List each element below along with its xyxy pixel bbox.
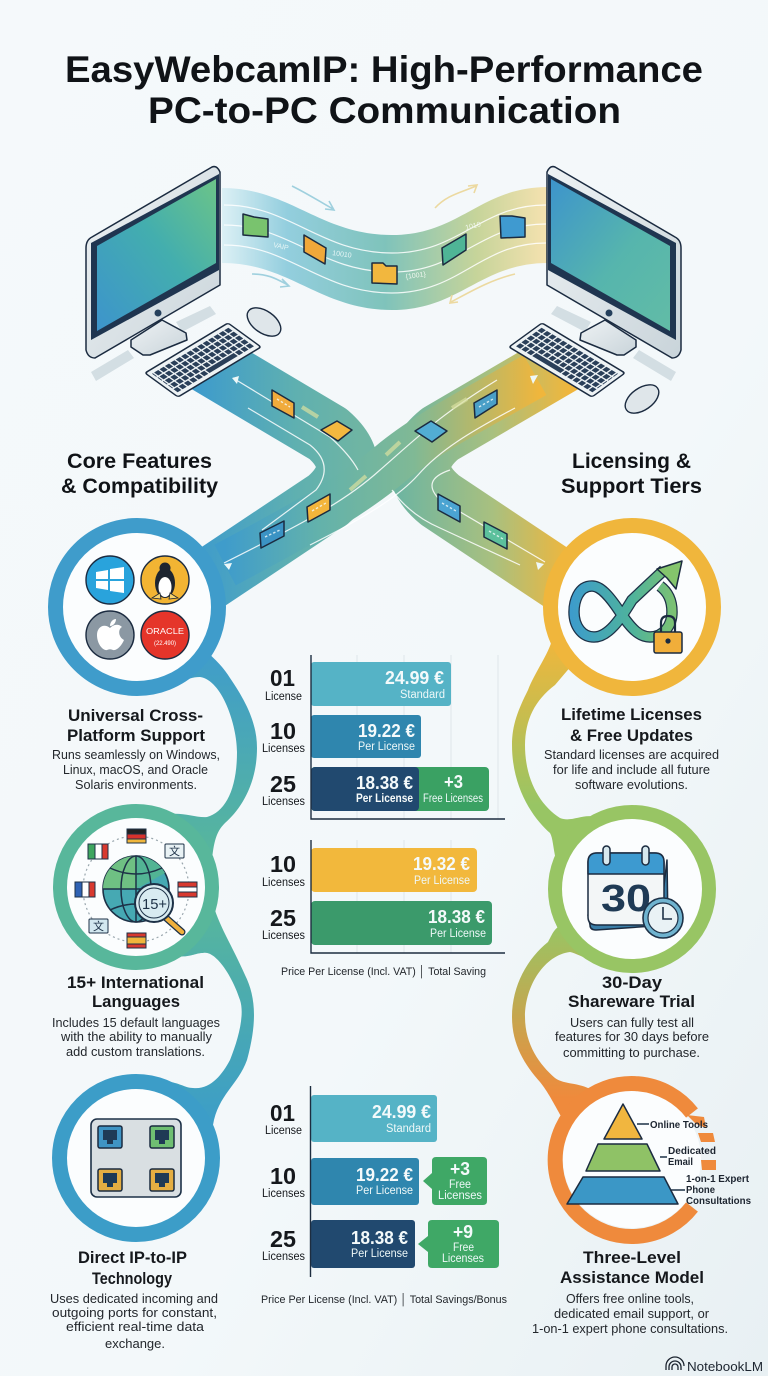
data stream between monitors — [222, 185, 548, 310]
panel: international languages — [60, 811, 212, 963]
callout: +9 free licences: Licenses — [442, 1253, 484, 1265]
icon: support pyramid — [567, 1104, 685, 1204]
heading: licensing: Licensing & — [572, 450, 691, 473]
translate glyphs — [93, 844, 180, 933]
chart caption: Price Per License (Incl. VAT) │ Total Saving — [281, 964, 486, 979]
text: direct ip-to-ip: efficient real-time data — [66, 1320, 204, 1334]
icon: calendar with clock: 30 — [601, 878, 651, 920]
bar: 25 licences with bonus: +3 — [444, 772, 463, 792]
heading: licensing — [561, 450, 702, 498]
row labels: 25 — [270, 771, 296, 797]
pyramid labels: Email — [668, 1156, 693, 1168]
bar: 01 licence: Standard — [386, 1123, 431, 1135]
monitor stand — [131, 320, 187, 355]
callout: +3 free licences: +3 — [450, 1159, 470, 1179]
text: universal cross-platform: Runs seamlessly on Windows, — [52, 748, 220, 762]
row labels: Licenses — [262, 930, 305, 942]
text: shareware trial: 30-Day — [602, 973, 663, 992]
title: EasyWebcamIP: High-Performance — [65, 49, 703, 90]
text: direct ip-to-ip: exchange. — [105, 1337, 165, 1351]
text: lifetime licences: software evolutions. — [575, 778, 688, 792]
heading: core features: & Compatibility — [61, 475, 218, 498]
panel: shareware trial — [555, 812, 709, 966]
icon: apple — [86, 611, 134, 659]
text: languages: with the ability to manually — [60, 1030, 213, 1044]
icon: calendar with clock — [588, 846, 683, 938]
text: direct ip-to-ip: Technology — [92, 1269, 172, 1288]
bar: yellow 10 licences: Per License — [414, 875, 470, 887]
icon: yellow folder — [372, 263, 397, 284]
text: languages: 15+ International — [67, 973, 204, 992]
bar: 25 licences with bonus — [311, 767, 489, 811]
bar: yellow 10 licences — [311, 848, 477, 892]
row labels: 10 — [270, 1163, 296, 1189]
icon: road chip green — [484, 522, 507, 549]
bar: yellow 10 licences: 19.32 € — [413, 854, 470, 874]
row labels: 01 — [270, 665, 295, 691]
crossing roads — [205, 361, 565, 582]
bar chart: licence pricing two — [262, 840, 505, 979]
bar: 01 licence: 24.99 € — [372, 1102, 431, 1122]
text: direct ip-to-ip: Uses dedicated incoming and — [50, 1292, 218, 1306]
bar: 01 licence — [311, 662, 451, 706]
icon: green data chip — [442, 234, 466, 265]
panel: direct ip-to-ip — [60, 1082, 212, 1234]
icon: magnifier 15+: 15+ — [142, 896, 167, 913]
title: PC-to-PC Communication — [148, 90, 621, 131]
text: universal cross-platform: Solaris environments. — [75, 778, 197, 792]
right computer — [509, 167, 681, 419]
bar chart: licence pricing one — [262, 655, 505, 819]
bar: green 25 licences: 18.38 € — [428, 907, 485, 927]
notebooklm logo — [666, 1357, 763, 1374]
row labels: 10 — [270, 851, 296, 877]
bar: 10 licences — [311, 1158, 419, 1205]
chart caption: Price Per License (Incl. VAT) │ Total Savings/Bonus — [261, 1292, 507, 1307]
text: direct ip-to-ip: Direct IP-to-IP — [78, 1248, 187, 1267]
heading: core features: Core Features — [67, 450, 212, 473]
left rail connector lower — [168, 900, 254, 1125]
bar: green 25 licences: Per License — [430, 928, 486, 940]
callout: +3 free licences — [423, 1157, 487, 1205]
right rail connector upper — [512, 640, 598, 860]
icon: road chip blue lower right — [438, 494, 460, 522]
icon: road chip blue left — [260, 521, 284, 548]
row labels: Licenses — [262, 877, 305, 889]
row labels: Licenses — [262, 1251, 305, 1263]
bar: 01 licence: 24.99 € — [385, 668, 444, 688]
mouse — [242, 302, 286, 342]
row labels: Licenses — [262, 743, 305, 755]
translate glyphs: 文 — [93, 919, 104, 933]
bar: 25 licences with bonus: 18.38 € — [356, 773, 413, 793]
callout: +9 free licences: Free — [453, 1242, 474, 1254]
row labels — [262, 1100, 305, 1263]
icon: tilted orange folder — [304, 235, 326, 264]
icon: windows — [86, 556, 134, 604]
callout: +9 free licences: +9 — [453, 1222, 473, 1242]
mouse — [620, 379, 664, 419]
panel: three-level assistance — [555, 1084, 751, 1237]
bar: 25 licences with bonus: Per License — [356, 793, 413, 805]
icon: oracle: (22.490) — [154, 641, 176, 647]
pyramid labels — [650, 1119, 751, 1207]
text: three-level assistance: Offers free online tools, — [566, 1292, 694, 1306]
icon: infinity growth arrow with lock — [574, 561, 682, 653]
row labels: 01 — [270, 1100, 295, 1126]
bar: 25 licences with bonus: Free Licenses — [423, 793, 483, 805]
translate glyphs: 文 — [169, 844, 180, 858]
text: shareware trial: committing to purchase. — [563, 1046, 700, 1060]
bar: 25 licences: Per License — [351, 1248, 408, 1260]
row labels: Licenses — [262, 1188, 305, 1200]
icon: oracle — [141, 611, 189, 659]
panel: lifetime licences — [550, 526, 714, 688]
bar: 01 licence — [311, 1095, 437, 1142]
bar: green 25 licences — [311, 901, 492, 945]
text: languages — [52, 973, 220, 1059]
bar: 01 licence: Standard — [400, 689, 445, 701]
icon: magnifier 15+ — [135, 884, 182, 932]
icon: green folder — [243, 214, 268, 237]
icon: road parcel blue — [415, 421, 447, 442]
pyramid labels: Dedicated — [668, 1145, 716, 1157]
data stream between monitors: 10010 — [332, 250, 352, 260]
bar: 25 licences: 18.38 € — [351, 1228, 408, 1248]
callout: +9 free licences — [418, 1220, 499, 1268]
data stream between monitors: 1010 — [465, 221, 482, 232]
icon: network ports panel — [91, 1119, 181, 1197]
pyramid labels: Online Tools — [650, 1119, 708, 1131]
callout: +3 free licences: Free — [449, 1179, 471, 1191]
text: three-level assistance: Assistance Model — [560, 1268, 704, 1287]
icon: road folder yellow — [307, 494, 330, 522]
text: lifetime licences: & Free Updates — [570, 726, 693, 745]
row labels: 25 — [270, 1226, 296, 1252]
text: universal cross-platform: Universal Cross- — [68, 706, 203, 725]
icon: language flags — [75, 829, 197, 948]
icon: oracle: ORACLE — [146, 627, 184, 636]
icon: road folder orange — [272, 390, 294, 418]
text: three-level assistance — [532, 1248, 728, 1336]
text: three-level assistance: dedicated email support, or — [554, 1307, 709, 1321]
text: shareware trial: Shareware Trial — [568, 992, 695, 1011]
text: direct ip-to-ip — [50, 1248, 218, 1351]
icon: blue folder — [500, 216, 525, 238]
text: lifetime licences: Lifetime Licenses — [561, 705, 702, 724]
icon: road chip blue upper right — [474, 390, 497, 418]
bar: 25 licences — [311, 1220, 415, 1268]
notebooklm logo: NotebookLM — [687, 1359, 763, 1374]
text: lifetime licences: Standard licenses are acquired — [544, 748, 719, 762]
data stream between monitors: {1001} — [405, 271, 427, 281]
text: languages: Includes 15 default languages — [52, 1016, 220, 1030]
text: languages: add custom translations. — [66, 1045, 205, 1059]
monitor — [547, 167, 681, 358]
bar: 10 licences: 19.22 € — [356, 1165, 413, 1185]
icon: linux penguin — [141, 556, 189, 604]
callout: +3 free licences: Licenses — [438, 1190, 482, 1202]
text: universal cross-platform: Platform Support — [67, 726, 205, 745]
bar: 10 licences — [311, 715, 421, 758]
pyramid labels: 1-on-1 Expert — [686, 1173, 749, 1185]
heading: core features — [61, 450, 218, 498]
text: universal cross-platform: Linux, macOS, and Oracle — [63, 763, 208, 777]
keyboard — [509, 323, 625, 397]
left rail connector upper — [165, 650, 257, 860]
data stream between monitors: VAIP — [273, 242, 289, 252]
monitor — [86, 167, 220, 358]
panel: universal cross-platform — [56, 526, 218, 688]
row labels — [262, 665, 305, 808]
text: lifetime licences: for life and include all future — [553, 763, 710, 777]
text: languages: Languages — [92, 992, 180, 1011]
text: three-level assistance: 1-on-1 expert phone consultations. — [532, 1322, 728, 1336]
left computer — [86, 167, 286, 397]
row labels — [262, 851, 305, 942]
right rail connector lower — [512, 925, 592, 1118]
icon: road parcel yellow — [321, 421, 352, 441]
keyboard — [145, 323, 261, 397]
row labels: Licenses — [262, 796, 305, 808]
text: direct ip-to-ip: outgoing ports for constant, — [52, 1306, 217, 1320]
text: lifetime licences — [544, 705, 719, 792]
monitor stand — [580, 320, 636, 355]
row labels: License — [265, 691, 302, 703]
bar: 10 licences: Per License — [358, 741, 415, 753]
bar chart: licence pricing three — [261, 1086, 507, 1307]
text: universal cross-platform — [52, 706, 220, 792]
bar: 10 licences: 19.22 € — [358, 721, 415, 741]
text: three-level assistance: Three-Level — [583, 1248, 681, 1267]
title — [65, 49, 703, 131]
row labels: 10 — [270, 718, 296, 744]
icon: globe — [103, 856, 169, 922]
pyramid labels: Phone — [686, 1184, 715, 1196]
row labels: License — [265, 1125, 302, 1137]
text: shareware trial: features for 30 days before — [555, 1030, 709, 1044]
pyramid labels: Consultations — [686, 1195, 751, 1207]
text: shareware trial: Users can fully test all — [570, 1016, 694, 1030]
row labels: 25 — [270, 905, 296, 931]
bar: 10 licences: Per License — [356, 1185, 413, 1197]
heading: licensing: Support Tiers — [561, 475, 702, 498]
text: shareware trial — [555, 973, 709, 1060]
